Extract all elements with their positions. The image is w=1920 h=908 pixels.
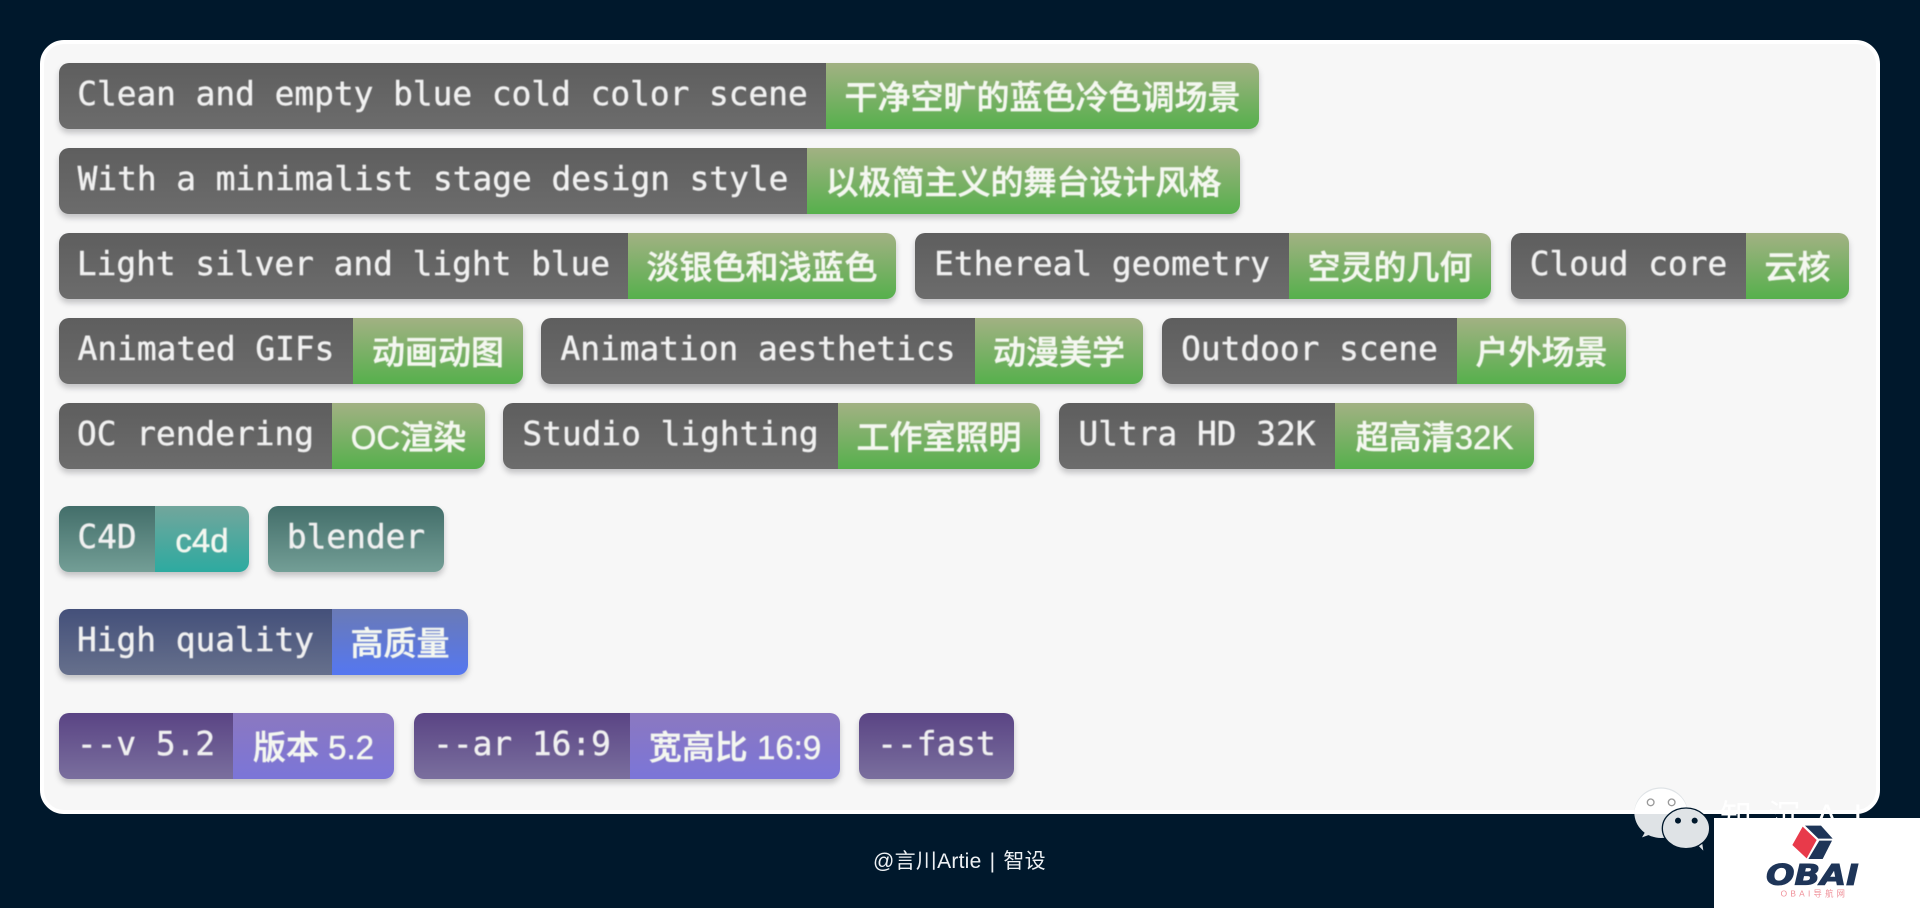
tag: With a minimalist stage design style <box>59 148 1240 214</box>
tag: C4D: c4d <box>175 522 229 559</box>
tag: Light silver and light blue <box>59 233 896 299</box>
tag: High quality <box>59 609 468 675</box>
tag: Outdoor scene: 户外场景 <box>1476 334 1608 371</box>
tag: Ethereal geometry: Ethereal geometry <box>934 245 1270 283</box>
icon: WeChat bubbles and OBAI logo <box>1634 788 1859 898</box>
tag: fast: --fast <box>877 725 996 763</box>
tag: Light silver and light blue: Light silver and light blue <box>77 245 610 283</box>
tag: Ethereal geometry: 空灵的几何 <box>1308 249 1472 286</box>
tag: blender <box>268 506 444 572</box>
tag: Animation aesthetics: Animation aesthetics <box>561 330 955 368</box>
tag: Studio lighting: 工作室照明 <box>856 419 1022 456</box>
tag: High quality: 高质量 <box>350 625 450 662</box>
logo: OBAI wordmark: OBAI <box>1766 858 1859 892</box>
tag: version 5.2: 版本 5.2 <box>253 729 374 766</box>
tag: Cloud core: Cloud core <box>1530 245 1727 283</box>
tag: High quality: High quality <box>77 621 314 659</box>
tag: Ultra HD 32K: Ultra HD 32K <box>1079 415 1315 453</box>
tag: version 5.2: --v 5.2 <box>77 725 215 763</box>
tag: Animated GIFs: 动画动图 <box>372 334 504 371</box>
tag: C4D: C4D <box>77 518 137 556</box>
tag: Cloud core: 云核 <box>1764 249 1830 286</box>
tag: Clean and empty blue cold color scene: 干净空旷的蓝色冷色调场景 <box>844 79 1240 116</box>
watermark: account name: 知沉AI <box>1720 798 1878 834</box>
tag: Animated GIFs: Animated GIFs <box>78 330 334 368</box>
tag: OC rendering: OC rendering <box>77 415 314 453</box>
tag: C4D <box>59 506 249 572</box>
tag: Animation aesthetics <box>541 318 1143 384</box>
tag: version 5.2 <box>59 713 394 779</box>
tag: aspect ratio 16:9 <box>414 713 840 779</box>
tag: OC rendering: OC渲染 <box>351 419 466 456</box>
tag: Clean and empty blue cold color scene: Clean and empty blue cold color scene <box>77 75 808 113</box>
tag: Light silver and light blue: 淡银色和浅蓝色 <box>646 249 878 286</box>
logo background box <box>1714 818 1920 908</box>
tag: Animation aesthetics: 动漫美学 <box>993 334 1125 371</box>
tag: Ethereal geometry <box>915 233 1491 299</box>
tag: With a minimalist stage design style: 以极简主义的舞台设计风格 <box>826 164 1222 201</box>
tag: Studio lighting <box>503 403 1040 469</box>
tag: With a minimalist stage design style: With a minimalist stage design style <box>78 160 788 198</box>
tag: Studio lighting: Studio lighting <box>522 415 819 453</box>
tag: aspect ratio 16:9: 宽高比 16:9 <box>649 729 821 766</box>
footer credit: @言川Artie | 智设 <box>873 850 1046 873</box>
tag: Animated GIFs <box>59 318 523 384</box>
tag: Ultra HD 32K <box>1059 403 1534 469</box>
tag: Clean and empty blue cold color scene <box>59 63 1259 129</box>
tag: Cloud core <box>1511 233 1849 299</box>
tag: Outdoor scene: Outdoor scene <box>1181 330 1438 368</box>
tag: blender: blender <box>287 518 425 556</box>
logo: OBAI subtitle: OBAI导航网 <box>1781 888 1845 898</box>
tag: Outdoor scene <box>1162 318 1626 384</box>
icon: WeChat bubbles <box>1634 787 1710 851</box>
tag: aspect ratio 16:9: --ar 16:9 <box>433 725 611 763</box>
tag: Ultra HD 32K: 超高清32K <box>1356 419 1513 456</box>
tag: OC rendering <box>59 403 485 469</box>
tag: fast <box>859 713 1014 779</box>
logo: cube mark <box>1792 826 1833 859</box>
